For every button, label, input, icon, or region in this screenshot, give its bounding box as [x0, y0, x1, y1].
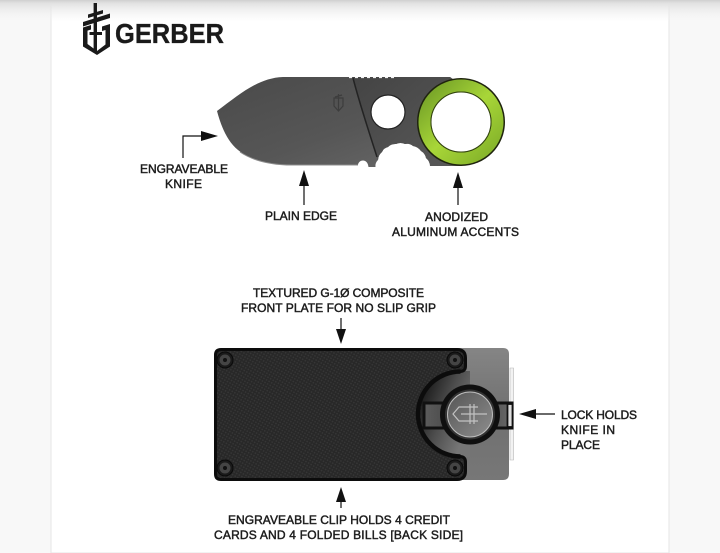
label: anodized aluminum accents: ALUMINUM ACCENTS: [392, 225, 519, 239]
lock bar: [424, 403, 512, 428]
arrow: front plate: [336, 318, 346, 344]
latch: [508, 404, 512, 427]
edge bevel: [240, 152, 358, 165]
label: textured front plate: TEXTURED G-1Ø COMPOSITE: [253, 286, 424, 300]
textured front plate: [216, 350, 466, 480]
label: anodized aluminum accents: ANODIZED: [425, 210, 488, 224]
plate arc edge: [418, 372, 460, 456]
arrow: engraveable knife: [183, 131, 218, 158]
label: engraveable clip: [214, 513, 463, 542]
arrow: lock: [519, 409, 555, 419]
label: plain edge: PLAIN EDGE: [265, 209, 337, 223]
side clip edge: [510, 368, 514, 460]
lock dial: [440, 384, 500, 444]
label: textured front plate: FRONT PLATE FOR NO SLIP GRIP: [241, 301, 436, 315]
label: engraveable knife: [140, 162, 228, 191]
knife blade and tang: [217, 77, 461, 167]
screws: [217, 352, 463, 476]
icon: sword shield: [83, 3, 110, 55]
hole outline: [371, 95, 405, 129]
label: engraveable knife: ENGRAVEABLE: [140, 162, 228, 176]
label: textured front plate: [241, 286, 436, 315]
label: lock holds knife: KNIFE IN: [561, 423, 615, 437]
logo: Gerber: [83, 3, 224, 55]
label: engraveable clip: ENGRAVEABLE CLIP HOLDS 4 CREDIT: [228, 513, 451, 527]
label: lock holds knife: PLACE: [561, 438, 600, 452]
blade divider: [353, 78, 377, 157]
wallet clip illustration: [216, 348, 514, 480]
knife illustration: [217, 77, 505, 167]
label: anodized aluminum accents: [392, 210, 519, 239]
tang shading: [353, 77, 461, 166]
green anodized ring: [417, 78, 505, 166]
metal back plate: [440, 348, 509, 480]
arrow: anodized accents: [453, 172, 463, 205]
arrow: engraveable clip: [336, 487, 346, 508]
wordmark: GERBER: [115, 18, 224, 49]
label: lock holds knife: LOCK HOLDS: [561, 408, 637, 422]
arrow: plain edge: [299, 170, 309, 205]
blade logo mark: [334, 94, 343, 111]
lock mechanism: [424, 384, 512, 444]
lock well: [420, 371, 470, 457]
label: engraveable clip: CARDS AND 4 FOLDED BILLS [BACK SIDE]: [214, 528, 463, 542]
dial logo: [453, 404, 487, 424]
label: lock holds knife: [561, 408, 637, 452]
jimping: [349, 76, 394, 78]
label: engraveable knife: KNIFE: [165, 177, 202, 191]
